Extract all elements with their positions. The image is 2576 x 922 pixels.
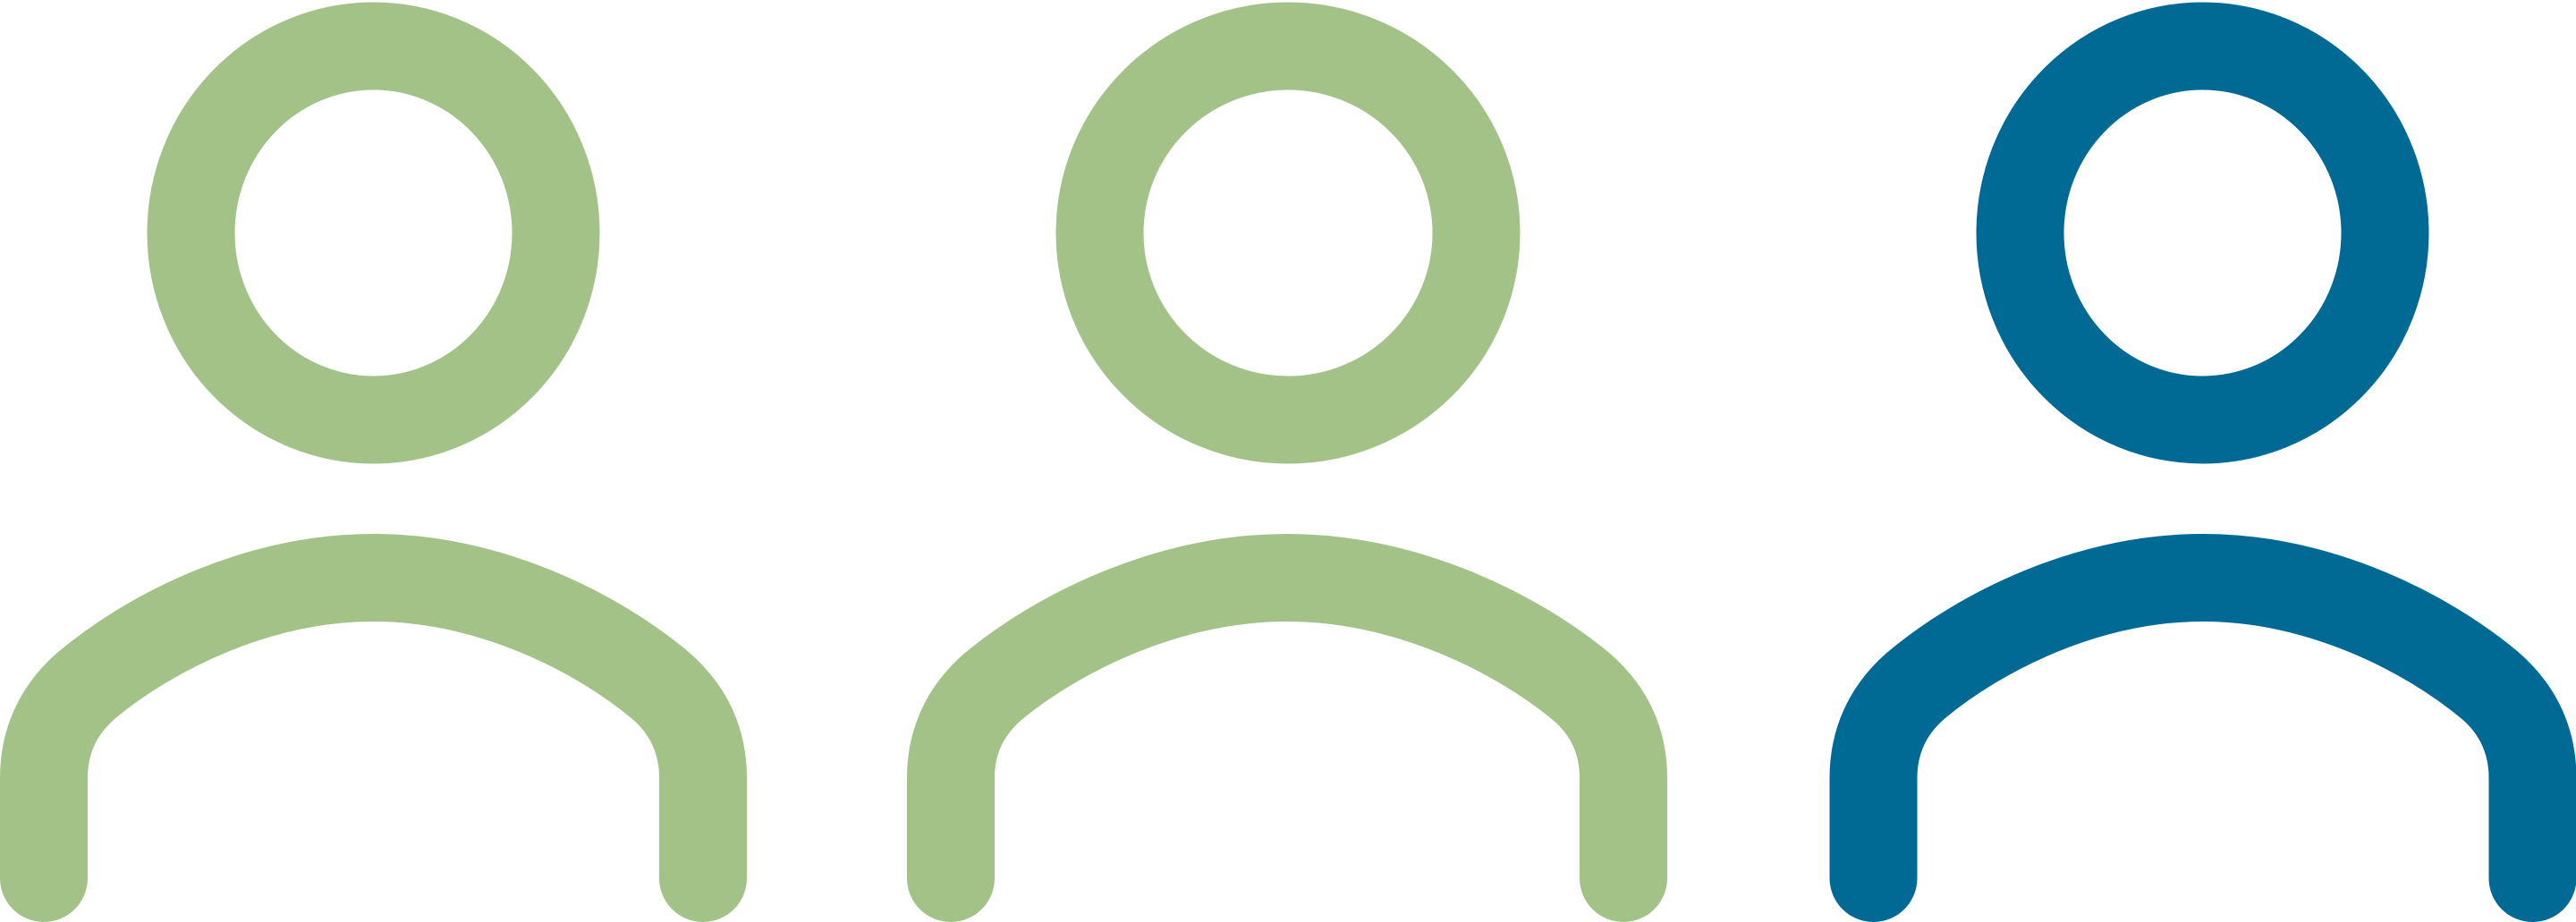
- shoulders: green person middle: [951, 578, 1623, 878]
- icon: green person middle: [951, 47, 1623, 878]
- head: green person middle: [1100, 47, 1476, 420]
- head: green person left: [191, 47, 556, 420]
- icon: blue person right: [1873, 47, 2533, 878]
- shoulders: blue person right: [1873, 578, 2533, 878]
- icon: green person left: [44, 47, 703, 878]
- shoulders: green person left: [44, 578, 703, 878]
- head: blue person right: [2020, 47, 2385, 420]
